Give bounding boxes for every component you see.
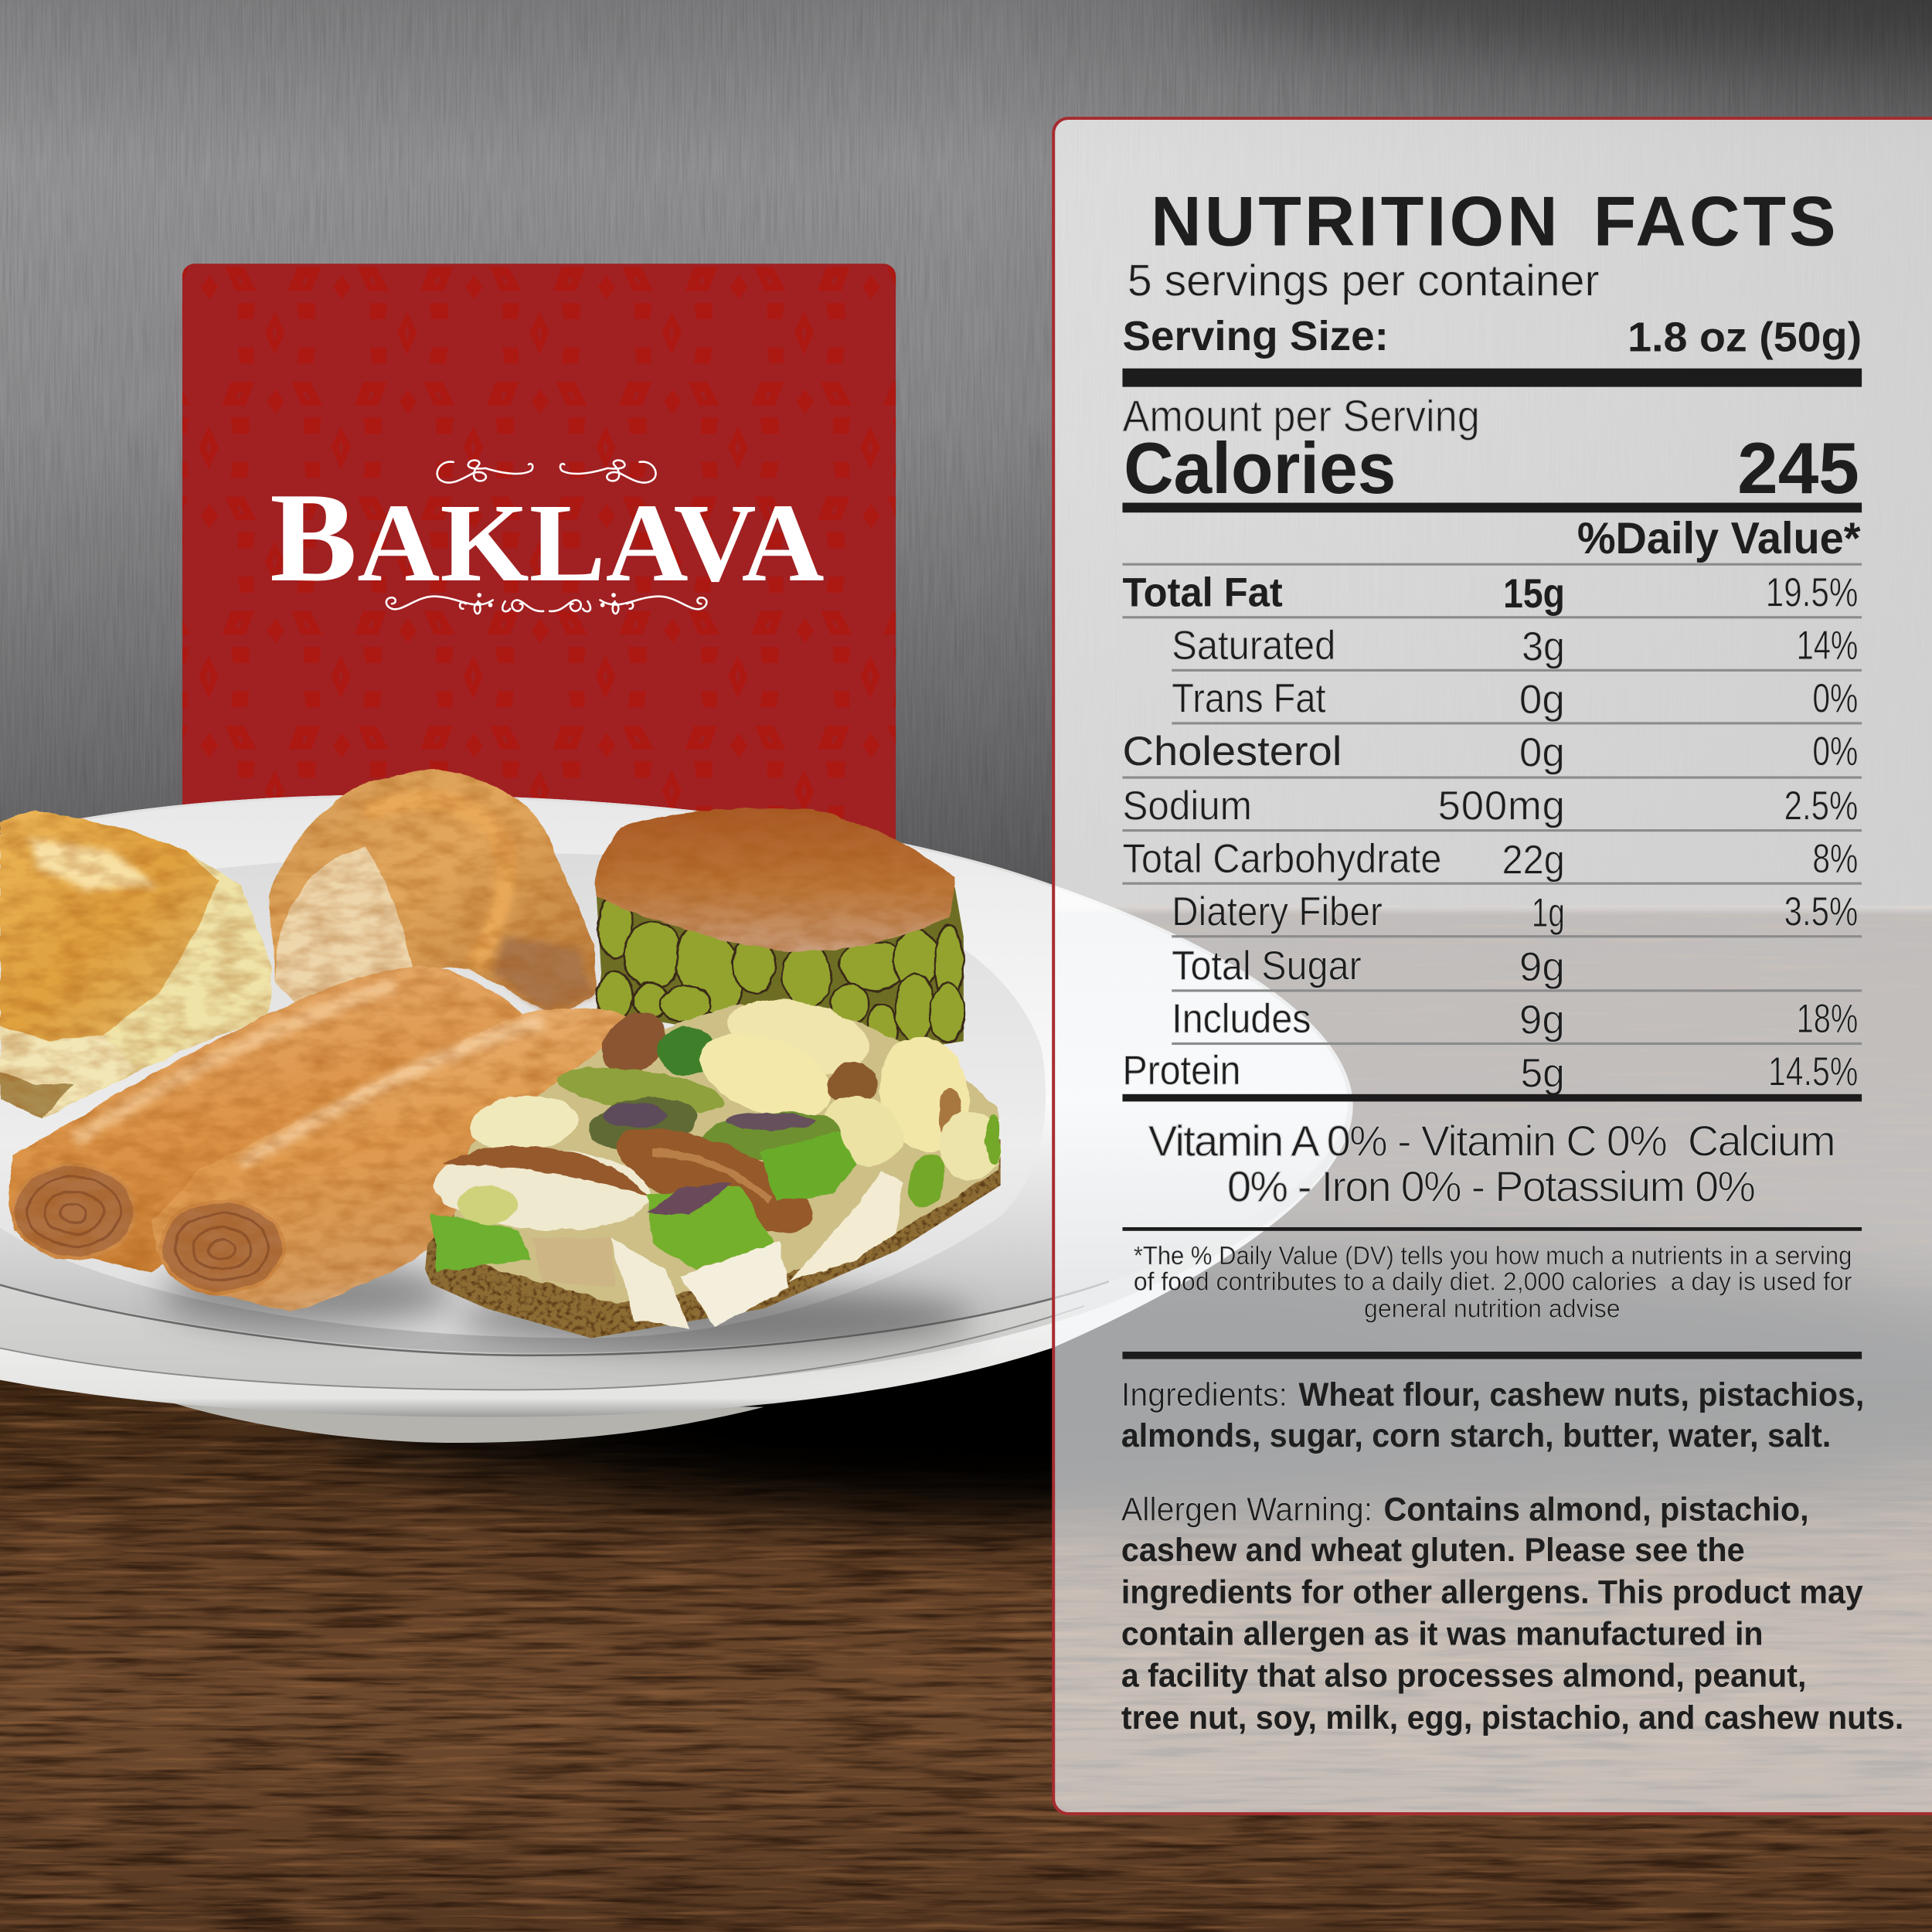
row: saturated: Saturated: [1172, 623, 1335, 668]
row: dietary fiber: Diatery Fiber: [1172, 889, 1383, 934]
row: dietary fiber: 1g: [1532, 890, 1565, 936]
row: total carbohydrate: 8%: [1812, 836, 1858, 882]
nut bar topping: [431, 988, 1001, 1328]
text: ingredients: Wheat flour, cashew nuts, pistachios,: [1298, 1376, 1864, 1413]
second roll: [151, 1009, 631, 1312]
text: vitamins and minerals: 0% - Iron 0% - Potassium 0%: [1227, 1162, 1756, 1211]
row: total sugar: 9g: [1519, 944, 1565, 990]
text: allergen warning: ingredients for other allergens. This product may: [1121, 1573, 1863, 1611]
row: trans fat: Trans Fat: [1172, 676, 1326, 722]
row: sodium: 2.5%: [1784, 783, 1858, 828]
calories row: Calories: [1124, 427, 1396, 509]
row: protein: 5g: [1520, 1050, 1565, 1096]
panel: nutrition facts card: [1053, 118, 1932, 1814]
row: total sugar: Total Sugar: [1172, 944, 1362, 989]
row: cholesterol: 0g: [1519, 730, 1565, 776]
ornament: bottom flourish: [386, 594, 706, 614]
text: daily value footnote: *The % Daily Value (DV) tells you how much a nutrients in a serving: [1134, 1242, 1852, 1270]
row: protein: [1122, 1048, 1858, 1096]
lower plate foot: [148, 1395, 764, 1443]
serving size row: [1122, 313, 1862, 360]
plate shadow on table: [308, 1250, 1932, 1522]
calories row: [1124, 427, 1859, 509]
serving size row: Serving Size:: [1122, 313, 1389, 359]
row: sodium: 500mg: [1438, 783, 1565, 828]
row: total fat: [1122, 570, 1858, 617]
row: includes: [1172, 996, 1858, 1043]
text: daily value footnote: of food contributes to a daily diet. 2,000 calories a day is used for: [1134, 1267, 1852, 1296]
text: ingredients: [1121, 1376, 1864, 1454]
background: wooden table: [0, 906, 1932, 1932]
logo: baklava title with flourishes: [270, 461, 825, 614]
row: saturated: [1172, 623, 1858, 670]
row: total fat: 15g: [1503, 571, 1565, 617]
row: total carbohydrate: 22g: [1502, 837, 1565, 883]
row: total carbohydrate: Total Carbohydrate: [1122, 836, 1441, 882]
row: cholesterol: 0%: [1812, 729, 1858, 774]
wordmark: BAKLAVA: [270, 466, 825, 608]
row: trans fat: 0%: [1812, 676, 1858, 722]
text: amount per serving: Amount per Serving: [1122, 392, 1480, 441]
nutrient table: [1122, 570, 1858, 1096]
text: daily value heading: %Daily Value*: [1577, 514, 1861, 563]
row: sodium: [1122, 783, 1858, 828]
calories row: 245: [1737, 427, 1859, 509]
food: pistachio-layer square with caramelised top: [595, 808, 964, 1059]
text: allergen warning: tree nut, soy, milk, egg, pistachio, and cashew nuts.: [1121, 1699, 1903, 1736]
ornament: top flourishes: [437, 461, 656, 483]
row: saturated: 14%: [1797, 623, 1858, 668]
food shadows on plate: [160, 1262, 974, 1350]
row: dietary fiber: [1172, 889, 1858, 936]
row: includes: Includes: [1172, 996, 1311, 1042]
row: protein: 14.5%: [1768, 1049, 1858, 1095]
background: grey textured wall: [0, 0, 1932, 1386]
row: cholesterol: [1122, 729, 1858, 776]
first roll: [8, 967, 524, 1273]
row: total sugar: [1172, 944, 1565, 990]
text: ingredients: Ingredients:: [1121, 1376, 1287, 1413]
text: daily value footnote: general nutrition advise: [1364, 1294, 1621, 1323]
row: protein: Protein: [1122, 1048, 1241, 1094]
food: square baklava with crumbly filling: [0, 810, 272, 1119]
text: vitamins and minerals: [1148, 1117, 1836, 1211]
text: vitamins and minerals: Vitamin A 0% - Vitamin C 0% Calcium: [1148, 1117, 1836, 1165]
row: includes: 18%: [1797, 996, 1858, 1042]
row: sodium: Sodium: [1122, 783, 1252, 828]
text: servings per container: 5 servings per container: [1128, 257, 1600, 306]
plate well: [0, 853, 1046, 1338]
row: trans fat: [1172, 676, 1858, 723]
row: total fat: 19.5%: [1766, 570, 1858, 615]
text: allergen warning: cashew and wheat gluten. Please see the: [1121, 1532, 1745, 1569]
food: mixed nut bar: [425, 988, 1001, 1338]
row: trans fat: 0g: [1519, 677, 1565, 723]
text: daily value footnote: [1134, 1242, 1852, 1323]
row: total fat: Total Fat: [1122, 570, 1283, 615]
food: rolled baklava fingers: [8, 967, 631, 1312]
text: ingredients: almonds, sugar, corn starch, butter, water, salt.: [1121, 1417, 1831, 1454]
text: allergen warning: Contains almond, pistachio,: [1383, 1491, 1809, 1528]
row: cholesterol: Cholesterol: [1122, 729, 1342, 774]
text: allergen warning: [1121, 1491, 1903, 1736]
row: total carbohydrate: [1122, 836, 1858, 883]
row: dietary fiber: 3.5%: [1784, 889, 1858, 934]
text: allergen warning: Allergen Warning:: [1121, 1491, 1372, 1528]
heading: nutrition facts: NUTRITION FACTS: [1151, 182, 1836, 260]
text: allergen warning: contain allergen as it was manufactured in: [1121, 1616, 1764, 1653]
nut bar crust: [425, 1084, 1001, 1338]
row: includes: 9g: [1519, 998, 1565, 1043]
row: saturated: 3g: [1522, 624, 1565, 670]
red product card: [182, 264, 896, 904]
serving size row: 1.8 oz (50g): [1628, 314, 1862, 360]
text: allergen warning: a facility that also processes almond, peanut,: [1121, 1658, 1806, 1695]
white plate: [0, 794, 1353, 1443]
food: wrapped baklava roll: [269, 770, 596, 1011]
